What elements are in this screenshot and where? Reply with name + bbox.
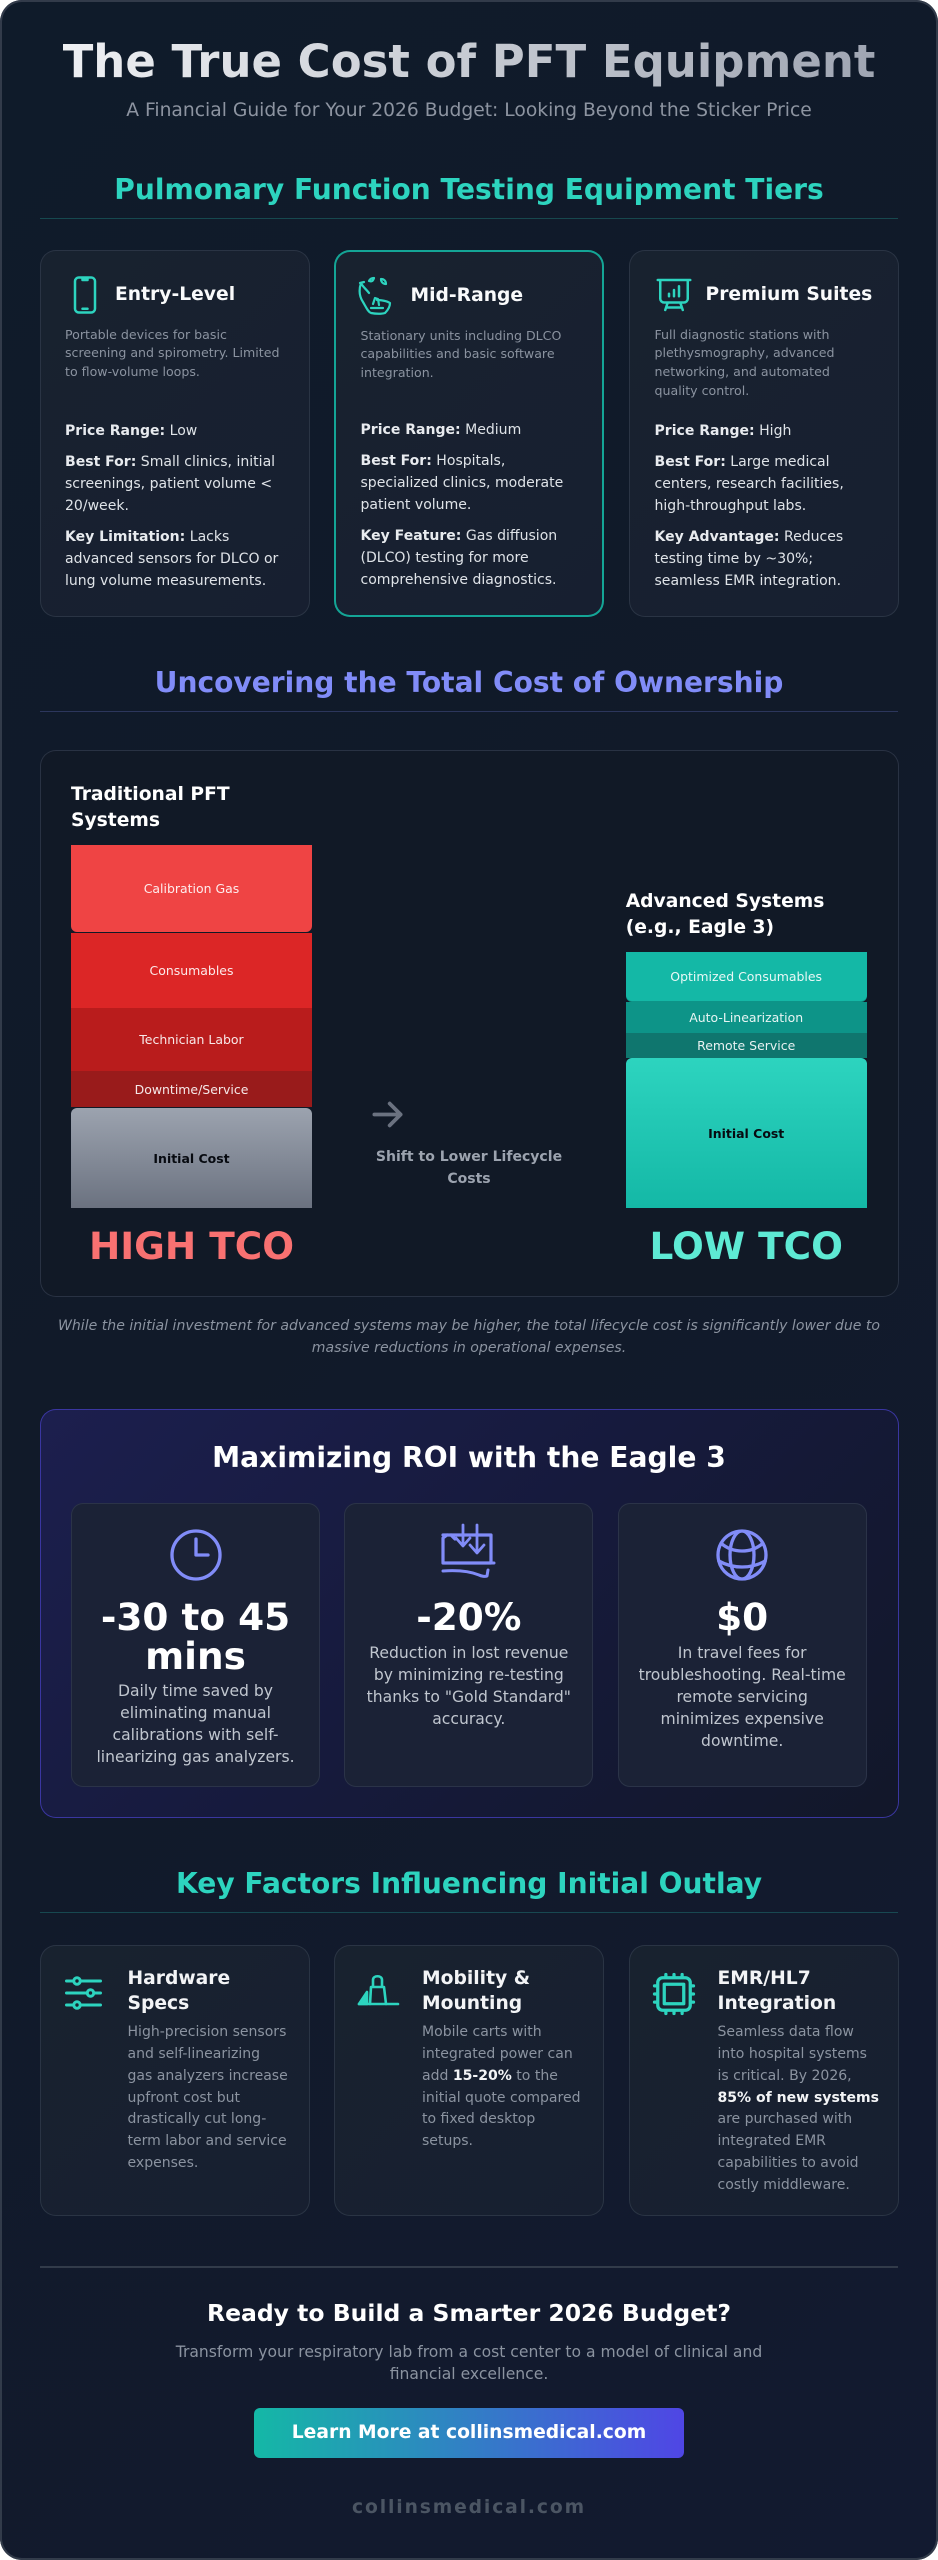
price range: Price Range: Medium: [360, 422, 521, 438]
best for: Best For: Hospitals,: [360, 453, 505, 469]
traditional systems heading: [71, 784, 230, 830]
factor description: term labor and service: [128, 2133, 287, 2149]
price range: Price Range: High: [654, 423, 791, 439]
key feature: (DLCO) testing for more: [360, 550, 529, 566]
segment: initial cost: Initial Cost: [153, 1150, 230, 1166]
factor description: integrated power can: [422, 2046, 573, 2062]
factor description: upfront cost but: [128, 2090, 240, 2106]
ROI heading: Maximizing ROI with the Eagle 3: [212, 1441, 726, 1474]
stat description: Daily time saved by: [118, 1682, 273, 1700]
factor description: High-precision sensors: [128, 2024, 286, 2040]
stat value: [101, 1594, 290, 1678]
factor title: Mounting: [422, 1992, 522, 2014]
note under comparison: While the initial investment for advanced systems may be higher, the total lifecycle cost is significantly lower due to: [58, 1318, 880, 1334]
factor title: Specs: [128, 1992, 189, 2014]
key advantage: Key Advantage: Reduces: [654, 529, 843, 545]
factor description: into hospital systems: [718, 2046, 867, 2062]
note under comparison: massive reductions in operational expenses.: [312, 1340, 626, 1356]
factor description: costly middleware.: [718, 2177, 850, 2193]
icon: mid-range device: [358, 276, 392, 315]
arrow caption: Shift to Lower Lifecycle: [376, 1149, 562, 1165]
segment: calibration gas: Calibration Gas: [144, 881, 239, 896]
segment: downtime: [71, 1071, 312, 1107]
segment: auto-linearization: [626, 1002, 867, 1033]
tier description: quality control.: [654, 383, 749, 398]
key feature: comprehensive diagnostics.: [360, 572, 556, 588]
stat value: -30 to 45: [101, 1594, 290, 1638]
stat description: remote servicing: [676, 1688, 808, 1706]
icon: presentation chart: [656, 278, 692, 312]
key advantage: testing time by ~30%;: [654, 551, 813, 567]
heading: key factors: Key Factors Influencing Initial Outlay: [176, 1866, 762, 1900]
stacked bar: advanced systems: [626, 952, 867, 1208]
tier description: plethysmography, advanced: [654, 345, 835, 360]
advanced systems heading: [626, 891, 824, 938]
tier title: Mid-Range: [410, 285, 523, 306]
panel: hardware specs: [40, 1945, 310, 2216]
tier description: to flow-volume loops.: [65, 364, 200, 379]
tier description: Full diagnostic stations with: [654, 326, 829, 342]
key limitation: Key Limitation: Lacks: [65, 529, 229, 545]
stat value: -20%: [416, 1594, 521, 1638]
stat value: mins: [145, 1634, 246, 1678]
advanced systems heading: Advanced Systems: [626, 891, 824, 912]
traditional systems heading: Traditional PFT: [71, 784, 230, 805]
label: high TCO: HIGH TCO: [89, 1224, 294, 1268]
key feature: [360, 528, 557, 588]
heading: total cost of ownership: Uncovering the Total Cost of Ownership: [155, 666, 783, 699]
best for: [360, 453, 563, 513]
tier description: screening and spirometry. Limited: [65, 345, 279, 360]
icon: globe: [716, 1529, 768, 1581]
segment: technician labor: Technician Labor: [139, 1032, 244, 1047]
panel: mid-range tier: [334, 250, 604, 617]
label: low TCO: LOW TCO: [649, 1224, 843, 1268]
stat description: troubleshooting. Real-time: [639, 1666, 846, 1684]
segment: optimized consumables: Optimized Consumables: [670, 969, 822, 984]
best for: Best For: Small clinics, initial: [65, 454, 275, 470]
best for: 20/week.: [65, 498, 129, 514]
stat description: downtime.: [701, 1732, 783, 1750]
icon: mobile device: [74, 276, 96, 314]
segment: consumables: Consumables: [150, 963, 233, 978]
key limitation: advanced sensors for DLCO or: [65, 551, 278, 567]
stat description: thanks to "Gold Standard": [367, 1688, 571, 1706]
factor title: [128, 1968, 230, 2014]
segment: remote service: Remote Service: [697, 1038, 795, 1053]
stat description: In travel fees for: [678, 1644, 807, 1662]
segment: calibration gas: [71, 845, 312, 932]
factor description: and self-linearizing: [128, 2046, 260, 2062]
tier title: Entry-Level: [115, 284, 235, 305]
factor description: capabilities to avoid: [718, 2155, 859, 2171]
best for: screenings, patient volume <: [65, 476, 272, 492]
factor description: [128, 2024, 288, 2171]
best for: [654, 454, 844, 514]
key feature: Key Feature: Gas diffusion: [360, 528, 557, 544]
panel: mobility and mounting: [334, 1945, 604, 2216]
key advantage: seamless EMR integration.: [654, 573, 841, 589]
factor title: [422, 1968, 530, 2014]
stat description: calibrations with self-: [113, 1726, 278, 1744]
factor description: 85% of new systems: [718, 2090, 879, 2106]
factor description: are purchased with: [718, 2111, 852, 2127]
panel: ROI: [40, 1409, 898, 1818]
factor description: add 15-20% to the: [422, 2068, 558, 2084]
stat description: by minimizing re-testing: [374, 1666, 564, 1684]
factor title: Hardware: [128, 1968, 230, 1988]
tier description: capabilities and basic software: [360, 346, 555, 361]
stat description: accuracy.: [432, 1710, 505, 1728]
tier title: Premium Suites: [706, 284, 872, 305]
stacked bar: traditional systems: [71, 845, 312, 1208]
segment: remote service: [626, 1033, 867, 1058]
tier description: [654, 326, 835, 398]
factor title: Mobility &: [422, 1968, 530, 1988]
icon: download tray: [441, 1524, 496, 1578]
factor description: integrated EMR: [718, 2133, 826, 2149]
stat description: Reduction in lost revenue: [369, 1644, 568, 1662]
segment: initial cost: [71, 1108, 312, 1208]
factor description: Mobile carts with: [422, 2024, 542, 2040]
icon: mobile cart: [358, 1975, 400, 2006]
factor description: to fixed desktop: [422, 2111, 535, 2127]
stat value: $0: [716, 1594, 768, 1638]
call to action text: financial excellence.: [390, 2365, 548, 2383]
best for: high-throughput labs.: [654, 498, 806, 514]
tier description: Portable devices for basic: [65, 326, 227, 342]
tier description: [360, 328, 561, 380]
segment: optimized consumables: [626, 952, 867, 1001]
factor title: [718, 1968, 836, 2014]
factor description: expenses.: [128, 2155, 198, 2171]
stat description: linearizing gas analyzers.: [96, 1748, 295, 1766]
traditional systems heading: Systems: [71, 810, 160, 830]
factor description: [718, 2024, 879, 2193]
tier description: integration.: [360, 365, 434, 380]
tier details: Price Range: Low: [65, 423, 197, 439]
subtitle: A Financial Guide for Your 2026 Budget: Looking Beyond the Sticker Price: [126, 100, 812, 121]
stat description: eliminating manual: [120, 1704, 271, 1722]
panel: EMR integration: [629, 1945, 899, 2216]
factor description: is critical. By 2026,: [718, 2068, 852, 2084]
segment: auto-linearization: Auto-Linearization: [689, 1010, 803, 1025]
best for: patient volume.: [360, 497, 471, 513]
panel: premium tier: [629, 250, 899, 617]
factor description: [422, 2024, 580, 2149]
stat description: [96, 1682, 295, 1766]
best for: specialized clinics, moderate: [360, 475, 563, 491]
stat description: [367, 1644, 571, 1728]
call to action text: [176, 2343, 762, 2383]
icon: sliders: [65, 1976, 102, 2010]
segment: initial cost: [626, 1058, 867, 1208]
button: [254, 2408, 684, 2458]
key advantage: [654, 529, 843, 589]
button: Learn More at collinsmedical.com: [292, 2422, 646, 2443]
arrow: [372, 1102, 403, 1128]
tier description: Stationary units including DLCO: [360, 328, 561, 342]
tier description: networking, and automated: [654, 364, 830, 379]
factor description: setups.: [422, 2133, 473, 2149]
best for: [65, 454, 275, 514]
factor description: initial quote compared: [422, 2090, 580, 2106]
factor title: EMR/HL7: [718, 1968, 811, 1988]
factor description: Seamless data flow: [718, 2024, 854, 2040]
segment: consumables: [71, 933, 312, 1008]
note under comparison: [58, 1318, 880, 1356]
call to action text: Transform your respiratory lab from a cost center to a model of clinical and: [176, 2343, 762, 2361]
arrow caption: Costs: [447, 1171, 491, 1187]
segment: initial cost: Initial Cost: [708, 1126, 784, 1140]
stat description: [639, 1644, 846, 1750]
footer URL: collinsmedical.com: [352, 2497, 586, 2518]
call to action heading: Ready to Build a Smarter 2026 Budget?: [207, 2299, 731, 2327]
heading: equipment tiers: Pulmonary Function Testing Equipment Tiers: [114, 172, 824, 206]
best for: Best For: Large medical: [654, 454, 830, 470]
title: The True Cost of PFT Equipment: [63, 35, 875, 88]
best for: centers, research facilities,: [654, 476, 844, 492]
advanced systems heading: (e.g., Eagle 3): [626, 916, 774, 938]
tier description: [65, 326, 279, 379]
stat card: travel fees: [618, 1503, 867, 1787]
arrow caption: [376, 1149, 562, 1187]
icon: clock: [170, 1529, 222, 1581]
key limitation: [65, 529, 278, 589]
panel: TCO comparison: [40, 750, 898, 1297]
segment: downtime: Downtime/Service: [135, 1082, 248, 1096]
stat card: lost revenue: [344, 1503, 593, 1787]
factor description: drastically cut long-: [128, 2111, 266, 2127]
icon: chip: [652, 1972, 696, 2016]
panel: entry-level tier: [40, 250, 310, 617]
factor title: Integration: [718, 1992, 836, 2014]
stat card: time saved: [71, 1503, 320, 1787]
segment: technician labor: [71, 1008, 312, 1071]
factor description: gas analyzers increase: [128, 2068, 288, 2084]
stat description: minimizes expensive: [661, 1710, 824, 1728]
key limitation: lung volume measurements.: [65, 573, 266, 589]
